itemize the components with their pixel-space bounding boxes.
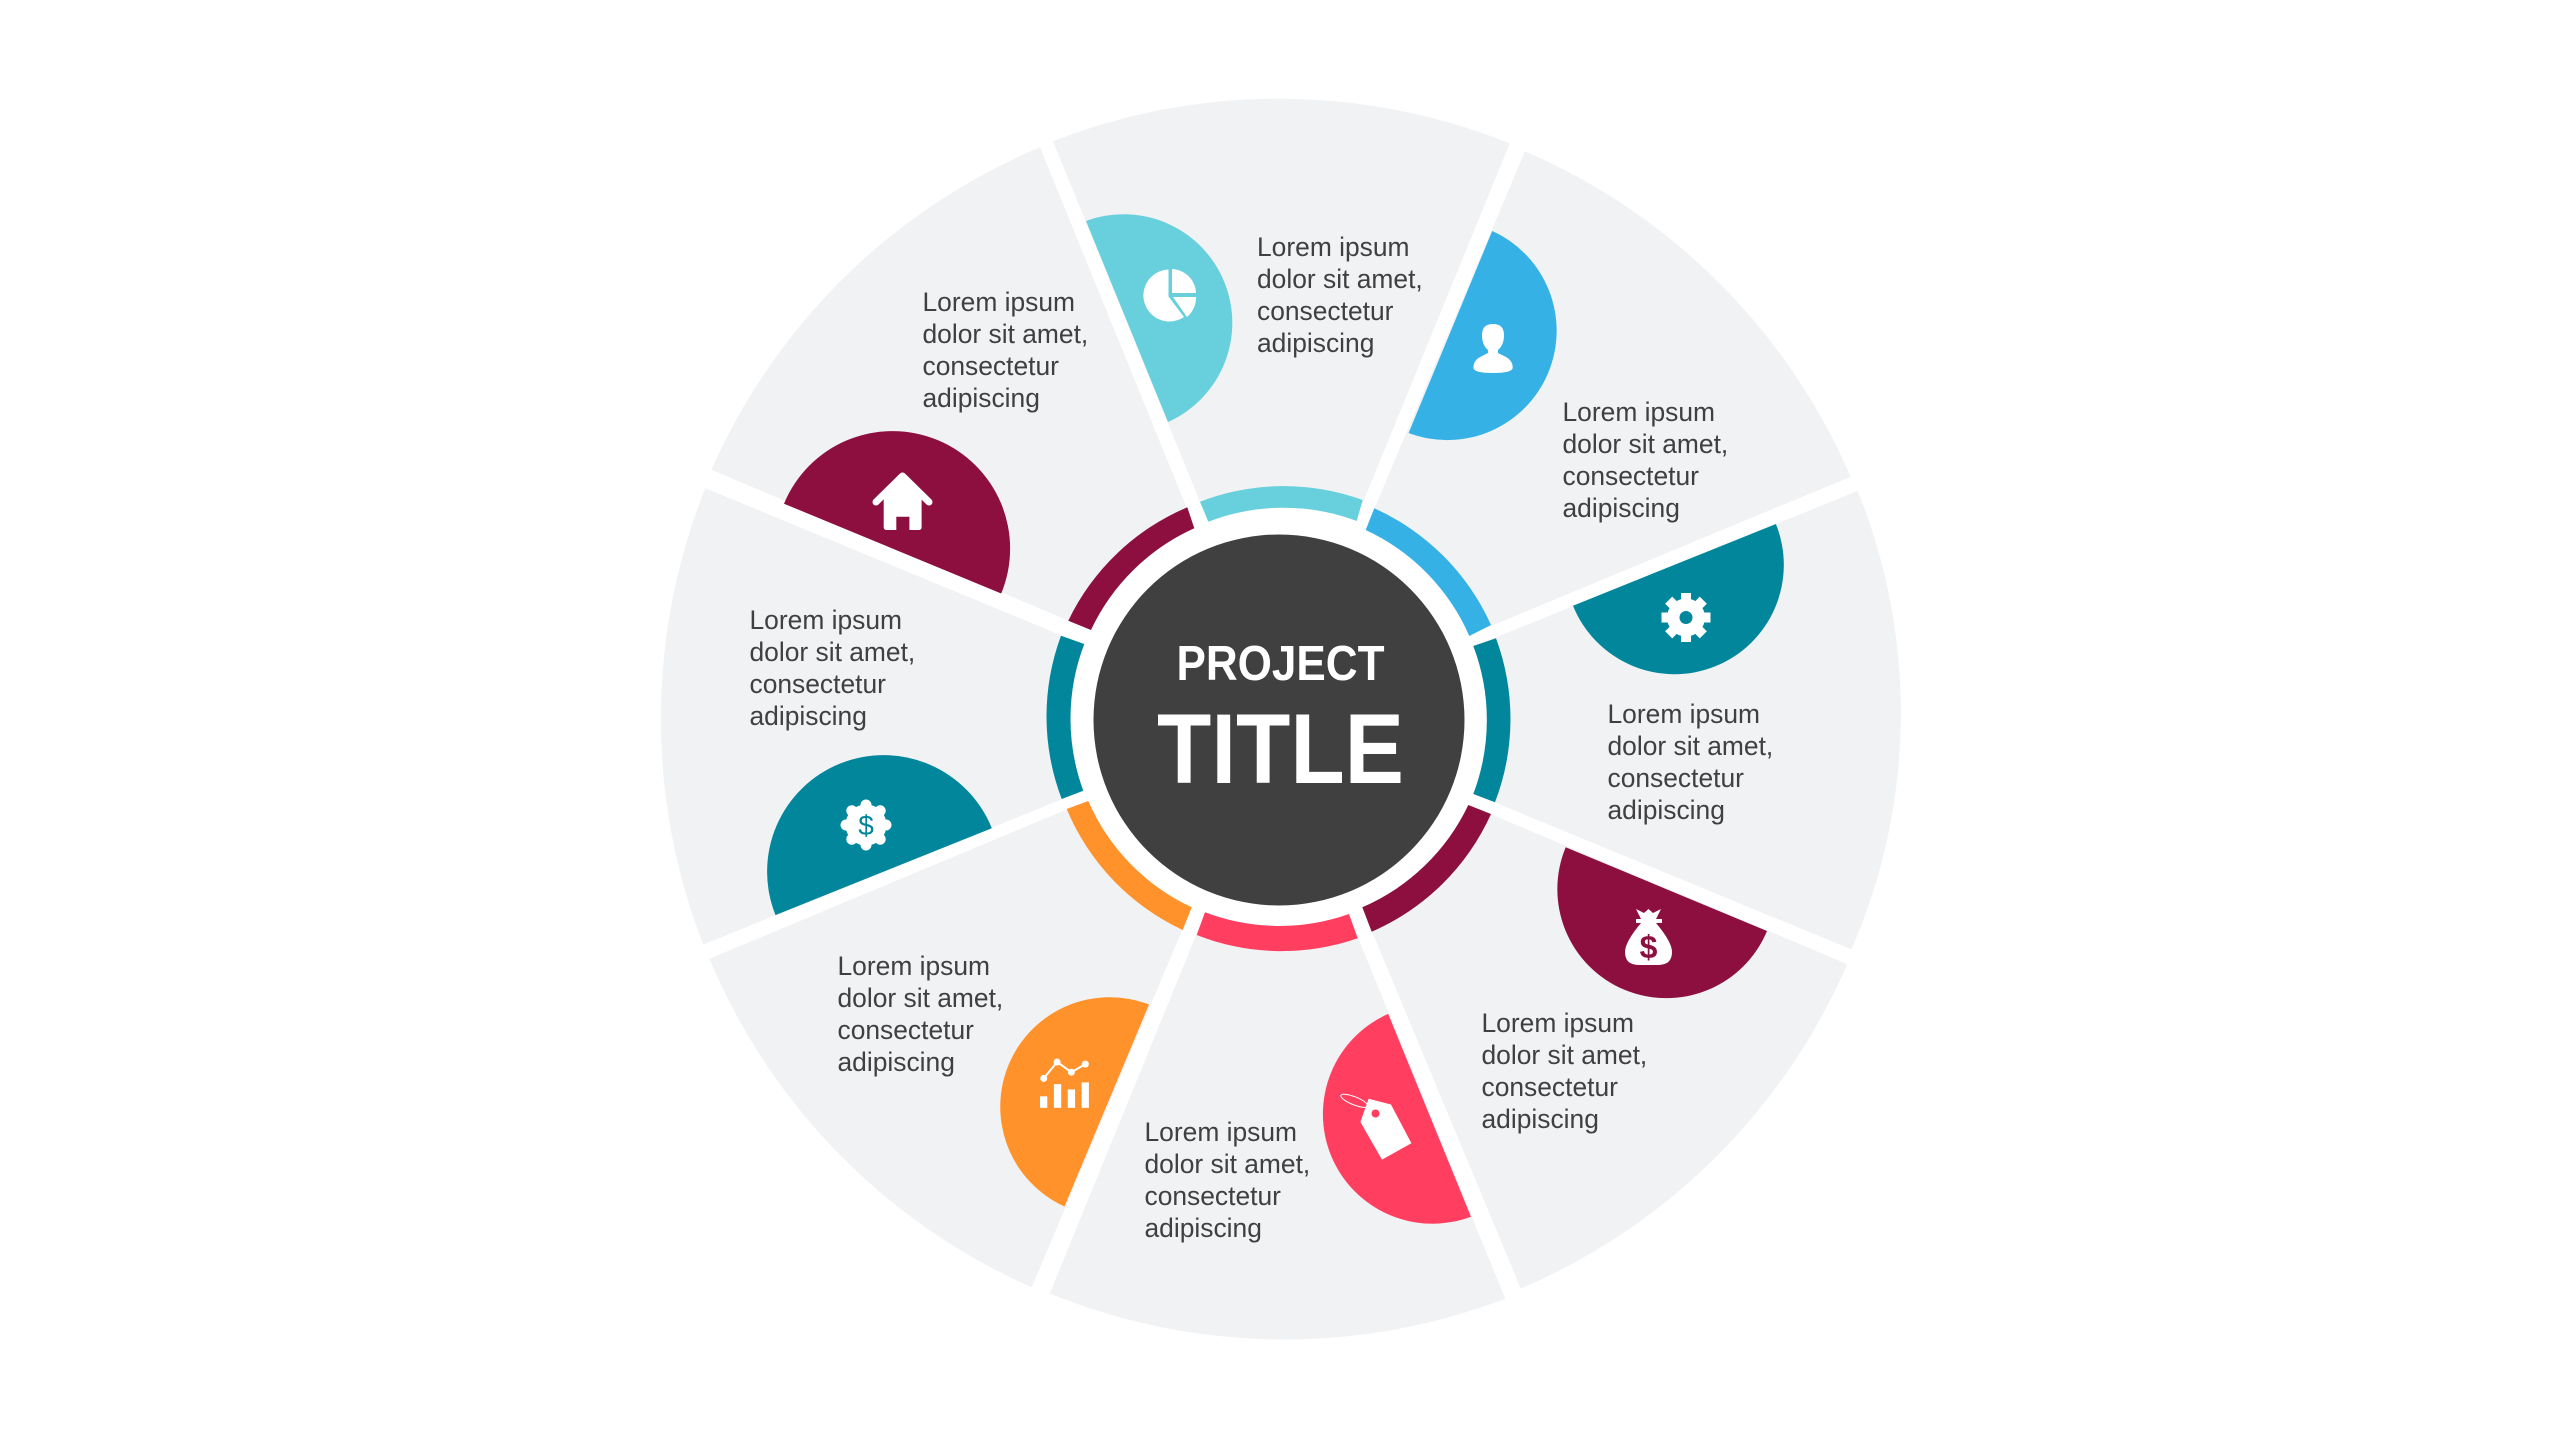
icon: pie chart bbox=[1143, 269, 1196, 321]
panel: right upper segment bbox=[1473, 491, 1901, 949]
icon: price tag bbox=[1339, 1092, 1411, 1160]
text block: adipiscing bbox=[1482, 1104, 1599, 1134]
half disc bbox=[1323, 1014, 1471, 1224]
text block: dolor sit amet, bbox=[922, 319, 1088, 349]
panel: lower right segment bbox=[1362, 805, 1847, 1289]
ring arc bbox=[1197, 912, 1358, 951]
segment background bbox=[709, 805, 1187, 1287]
icon: person bbox=[1473, 324, 1513, 373]
panel: top segment bbox=[1053, 99, 1510, 522]
text block: dolor sit amet, bbox=[1257, 264, 1423, 294]
text block: Lorem ipsum bbox=[750, 605, 902, 635]
center circle with project title bbox=[1094, 534, 1464, 906]
segment background bbox=[1484, 491, 1901, 949]
text block: consectetur bbox=[1482, 1072, 1618, 1102]
dark disc bbox=[1094, 534, 1464, 906]
half disc bbox=[1557, 847, 1767, 998]
text block: consectetur bbox=[838, 1015, 974, 1045]
icon: money bag bbox=[1625, 909, 1672, 965]
panel: bottom segment bbox=[1050, 912, 1505, 1339]
icon: money bag: $ bbox=[1640, 929, 1658, 965]
ring arc bbox=[1068, 507, 1194, 630]
half disc bbox=[784, 431, 1010, 594]
text block: Lorem ipsum bbox=[922, 287, 1075, 317]
text block: consectetur bbox=[1608, 763, 1744, 793]
text block: Lorem ipsum bbox=[1144, 1117, 1297, 1147]
text block: consectetur bbox=[922, 351, 1059, 381]
ring arc bbox=[1362, 805, 1491, 932]
icon: dollar gear: $ bbox=[858, 810, 874, 841]
half disc bbox=[1086, 214, 1232, 422]
text block: adipiscing bbox=[922, 383, 1040, 413]
half disc bbox=[1573, 524, 1784, 674]
text block: adipiscing bbox=[838, 1047, 955, 1077]
segment background bbox=[711, 147, 1191, 625]
text block: Lorem ipsum bbox=[1482, 1008, 1634, 1038]
text block: Lorem ipsum bbox=[1257, 232, 1410, 262]
text block: adipiscing bbox=[1608, 795, 1725, 825]
text block: dolor sit amet, bbox=[1482, 1040, 1647, 1070]
text block: consectetur bbox=[1562, 461, 1699, 491]
text block: adipiscing bbox=[1562, 493, 1680, 523]
half disc bbox=[1000, 997, 1149, 1206]
icon: bar and line chart bbox=[1040, 1058, 1089, 1108]
text block: dolor sit amet, bbox=[1144, 1149, 1310, 1179]
segment background bbox=[1053, 99, 1510, 512]
ring arc bbox=[1473, 638, 1510, 802]
text block: adipiscing bbox=[750, 701, 867, 731]
text block: dolor sit amet, bbox=[750, 637, 915, 667]
title line 2: TITLE bbox=[1157, 693, 1404, 804]
half disc bbox=[767, 755, 992, 915]
panel: lower left segment bbox=[709, 801, 1192, 1287]
ring arc bbox=[1047, 636, 1084, 799]
panel: left segment bbox=[661, 488, 1084, 944]
segment background bbox=[1367, 810, 1847, 1289]
ring arc bbox=[1200, 486, 1363, 522]
segment background bbox=[1050, 924, 1505, 1339]
panel: upper left segment bbox=[711, 147, 1194, 630]
panel: upper right segment bbox=[1366, 151, 1851, 636]
ring arc bbox=[1366, 508, 1491, 636]
text block: Lorem ipsum bbox=[838, 951, 990, 981]
half disc bbox=[1409, 231, 1557, 440]
text block: consectetur bbox=[750, 669, 886, 699]
icon: house bbox=[876, 476, 929, 530]
text block: Lorem ipsum bbox=[1562, 397, 1715, 427]
text block: consectetur bbox=[1144, 1181, 1281, 1211]
text block: adipiscing bbox=[1144, 1213, 1262, 1243]
text block: adipiscing bbox=[1257, 328, 1374, 358]
icon: dollar gear bbox=[846, 804, 886, 846]
text block: dolor sit amet, bbox=[838, 983, 1003, 1013]
segment background bbox=[1370, 151, 1851, 630]
text block: Lorem ipsum bbox=[1608, 699, 1760, 729]
text block: dolor sit amet, bbox=[1562, 429, 1728, 459]
ring arc bbox=[1067, 801, 1192, 930]
title line 1: PROJECT bbox=[1176, 637, 1385, 691]
icon: gear bbox=[1662, 593, 1710, 642]
text block: consectetur bbox=[1257, 296, 1394, 326]
text block: dolor sit amet, bbox=[1608, 731, 1773, 761]
segment background bbox=[661, 488, 1073, 944]
